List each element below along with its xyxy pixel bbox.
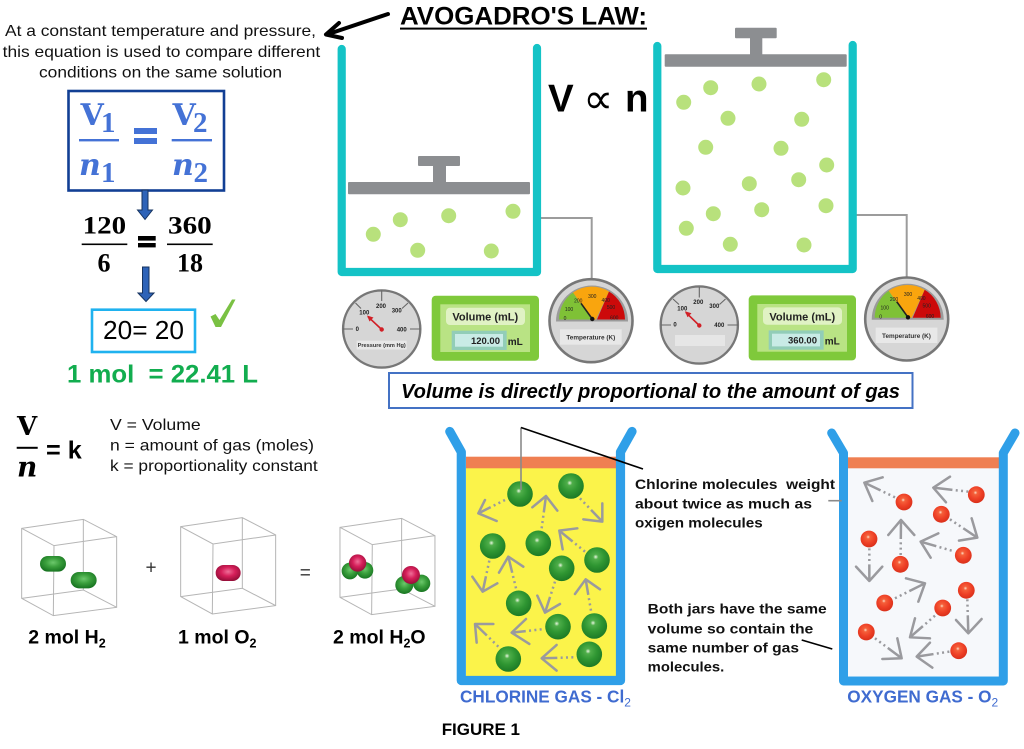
temperature gauge 1: 300 bbox=[588, 294, 597, 300]
annotation: chlorine weight bbox=[635, 476, 835, 530]
reaction labels: 2 mol H bbox=[28, 626, 99, 648]
chlorine motion arrows bbox=[472, 496, 602, 671]
pressure gauge 1: 100 bbox=[359, 310, 370, 316]
plus sign: + bbox=[145, 558, 157, 578]
numeric fractions: 6 bbox=[98, 249, 110, 278]
volume readout 2 bbox=[749, 295, 856, 360]
intro text bbox=[3, 23, 321, 81]
arrow: numbers to result bbox=[138, 267, 154, 302]
pressure gauge 1: 200 bbox=[376, 304, 387, 310]
pressure gauge 1: Pressure (mm Hg) bbox=[358, 343, 406, 349]
caption: oxygen gas: 2 bbox=[992, 696, 999, 710]
panel: small gas container bbox=[342, 48, 592, 280]
equation box: V1/n1 = V2/n2: 1 bbox=[101, 157, 116, 189]
arrow: equation to numbers bbox=[138, 190, 152, 220]
reaction labels: 1 mol O bbox=[178, 626, 250, 648]
reaction labels: O bbox=[410, 626, 426, 648]
temperature gauge 1: Temperature (K) bbox=[566, 334, 615, 342]
reaction labels bbox=[28, 626, 426, 650]
annotation: same volume: volume so contain the bbox=[648, 620, 814, 636]
formula V/n = k bbox=[16, 412, 82, 484]
variable legend: n = amount of gas (moles) bbox=[110, 437, 314, 454]
temperature gauge 2: 500 bbox=[923, 303, 931, 309]
temperature gauge 2: 0 bbox=[879, 314, 882, 320]
cube: 2 mol H2O bbox=[340, 518, 435, 615]
result box: 20= 20 bbox=[103, 315, 184, 345]
temperature gauge 1 bbox=[550, 279, 632, 362]
pressure gauge 2: 0 bbox=[673, 322, 677, 328]
cube: 2 mol H2 bbox=[22, 519, 117, 616]
pressure gauge 2: 300 bbox=[709, 304, 720, 310]
volume readout 1: mL bbox=[508, 337, 523, 348]
caption: oxygen gas: OXYGEN GAS - O bbox=[847, 687, 992, 707]
temperature gauge 1: 200 bbox=[574, 298, 583, 304]
proportionality symbol V ∝ n: ∝ bbox=[583, 74, 613, 123]
annotation: same volume: molecules. bbox=[648, 659, 724, 675]
volume readout 1: 120.00 bbox=[471, 336, 500, 347]
pressure gauge 1: 300 bbox=[392, 308, 402, 314]
variable legend: V = Volume bbox=[110, 417, 201, 434]
pressure gauge 2 bbox=[661, 286, 738, 364]
caption: chlorine gas: 2 bbox=[624, 696, 631, 710]
formula V/n = k: V bbox=[16, 412, 38, 442]
volume readout 2: mL bbox=[825, 337, 840, 348]
pressure gauge 1: 0 bbox=[356, 327, 360, 333]
equation box: V1/n1 = V2/n2: V bbox=[172, 98, 196, 133]
result box bbox=[92, 310, 195, 352]
equation box: V1/n1 = V2/n2: n bbox=[79, 148, 101, 183]
annotation: same volume: same number of gas bbox=[648, 639, 799, 655]
temperature gauge 2: Temperature (K) bbox=[882, 333, 931, 340]
annotation: same volume: Both jars have the same bbox=[648, 600, 827, 616]
volume readout 2: Volume (mL) bbox=[769, 311, 836, 323]
annotation: same volume bbox=[648, 600, 827, 675]
leader lines to jars bbox=[521, 428, 842, 649]
intro text: this equation is used to compare different bbox=[3, 44, 321, 61]
icon: check mark bbox=[210, 300, 236, 327]
annotation: chlorine weight: about twice as much as bbox=[635, 495, 812, 511]
formula V/n = k: n bbox=[17, 451, 37, 484]
annotation: chlorine weight: oxigen molecules bbox=[635, 514, 763, 530]
panel: large gas container bbox=[657, 28, 907, 277]
temperature gauge 1: 600 bbox=[610, 316, 619, 322]
temperature gauge 2: 300 bbox=[904, 292, 912, 298]
pressure gauge 1: 400 bbox=[397, 328, 407, 334]
annotation: chlorine weight: Chlorine molecules weight bbox=[635, 476, 835, 492]
temperature gauge 1: 500 bbox=[607, 305, 615, 311]
title: AVOGADRO'S LAW: bbox=[400, 2, 647, 30]
temperature gauge 2: 200 bbox=[890, 297, 898, 303]
temperature gauge 2: 600 bbox=[926, 314, 934, 320]
callout: direct proportionality bbox=[389, 373, 912, 408]
pressure gauge 2: 200 bbox=[693, 300, 704, 306]
reaction labels: 2 bbox=[99, 636, 106, 650]
volume readout 1 bbox=[432, 296, 539, 361]
equation box: V1/n1 = V2/n2 bbox=[68, 91, 224, 190]
formula V/n = k: = k bbox=[46, 436, 82, 464]
temperature gauge 2: 100 bbox=[881, 305, 889, 311]
numeric fractions: 120 bbox=[83, 212, 126, 239]
numeric fractions: 360 bbox=[168, 212, 212, 239]
callout: direct proportionality: Volume is directly proportional to the amount of gas bbox=[401, 381, 900, 403]
temperature gauge 2 bbox=[865, 278, 948, 360]
caption: chlorine gas: CHLORINE GAS - Cl bbox=[460, 687, 624, 707]
numeric fractions: 18 bbox=[177, 249, 203, 278]
pressure gauge 2: 100 bbox=[677, 306, 688, 312]
equation box: V1/n1 = V2/n2: n bbox=[172, 148, 194, 183]
equals sign: = bbox=[300, 563, 311, 584]
reaction labels: 2 bbox=[250, 636, 257, 650]
temperature gauge 1: 100 bbox=[565, 307, 573, 313]
chlorine molecules bbox=[480, 473, 610, 672]
temperature gauge 1: 0 bbox=[564, 316, 567, 322]
variable legend bbox=[110, 417, 318, 475]
arrow: title to intro text bbox=[326, 14, 388, 38]
pressure gauge 1 bbox=[343, 290, 420, 368]
intro text: conditions on the same solution bbox=[39, 64, 282, 81]
volume readout 2: 360.00 bbox=[788, 336, 817, 347]
proportionality symbol V ∝ n: n bbox=[625, 78, 649, 121]
variable legend: k = proportionality constant bbox=[110, 458, 318, 475]
equation box: V1/n1 = V2/n2: 1 bbox=[101, 107, 116, 139]
numeric fractions bbox=[82, 212, 213, 278]
intro text: At a constant temperature and pressure, bbox=[5, 23, 316, 40]
pressure gauge 2: 400 bbox=[714, 323, 725, 329]
temperature gauge 1: 400 bbox=[602, 298, 610, 304]
proportionality symbol V ∝ n: V bbox=[548, 78, 574, 121]
reaction labels: 2 mol H bbox=[333, 626, 403, 648]
equation box: V1/n1 = V2/n2: 2 bbox=[194, 157, 208, 189]
temperature gauge 2: 400 bbox=[917, 296, 926, 302]
equation box: V1/n1 = V2/n2: 2 bbox=[193, 107, 208, 139]
proportionality symbol V ∝ n bbox=[548, 74, 649, 123]
oxygen motion arrows bbox=[856, 477, 982, 668]
volume readout 1: Volume (mL) bbox=[452, 312, 519, 324]
panel: chlorine jar bbox=[450, 432, 632, 680]
panel: oxygen jar bbox=[832, 433, 1015, 681]
reaction labels: 2 bbox=[403, 636, 410, 650]
oxygen molecules bbox=[858, 486, 985, 659]
molar volume: 1 mol = 22.41 L bbox=[67, 361, 258, 389]
cube: 1 mol O2 bbox=[181, 518, 276, 614]
equation box: V1/n1 = V2/n2: V bbox=[80, 98, 104, 133]
figure label: FIGURE 1 bbox=[442, 720, 520, 739]
